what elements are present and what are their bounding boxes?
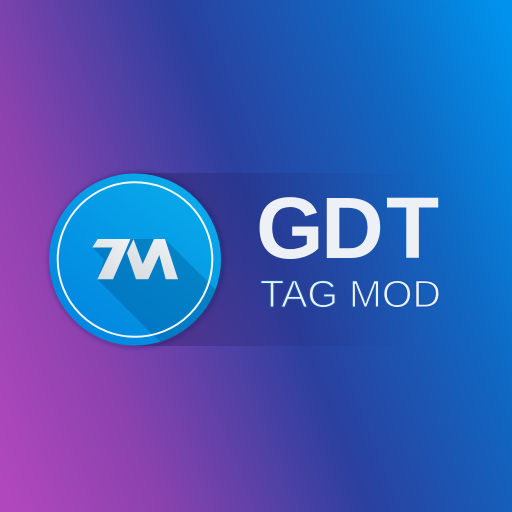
long shadow band — [135, 173, 420, 346]
white ring — [58, 182, 212, 337]
badge shadow — [49, 173, 223, 347]
title: GDT: D — [321, 180, 384, 277]
title: GDT: G — [256, 180, 324, 277]
title: GDT — [256, 180, 439, 277]
letter M — [127, 239, 178, 279]
7M logo mark — [92, 239, 178, 279]
title: GDT: T — [386, 180, 439, 277]
letter 7 — [92, 239, 130, 279]
subtitle: TAG MOD: TAG MOD — [260, 274, 441, 316]
badge disc — [49, 174, 221, 346]
logo badge — [49, 173, 240, 347]
logo long shadow — [92, 239, 216, 342]
